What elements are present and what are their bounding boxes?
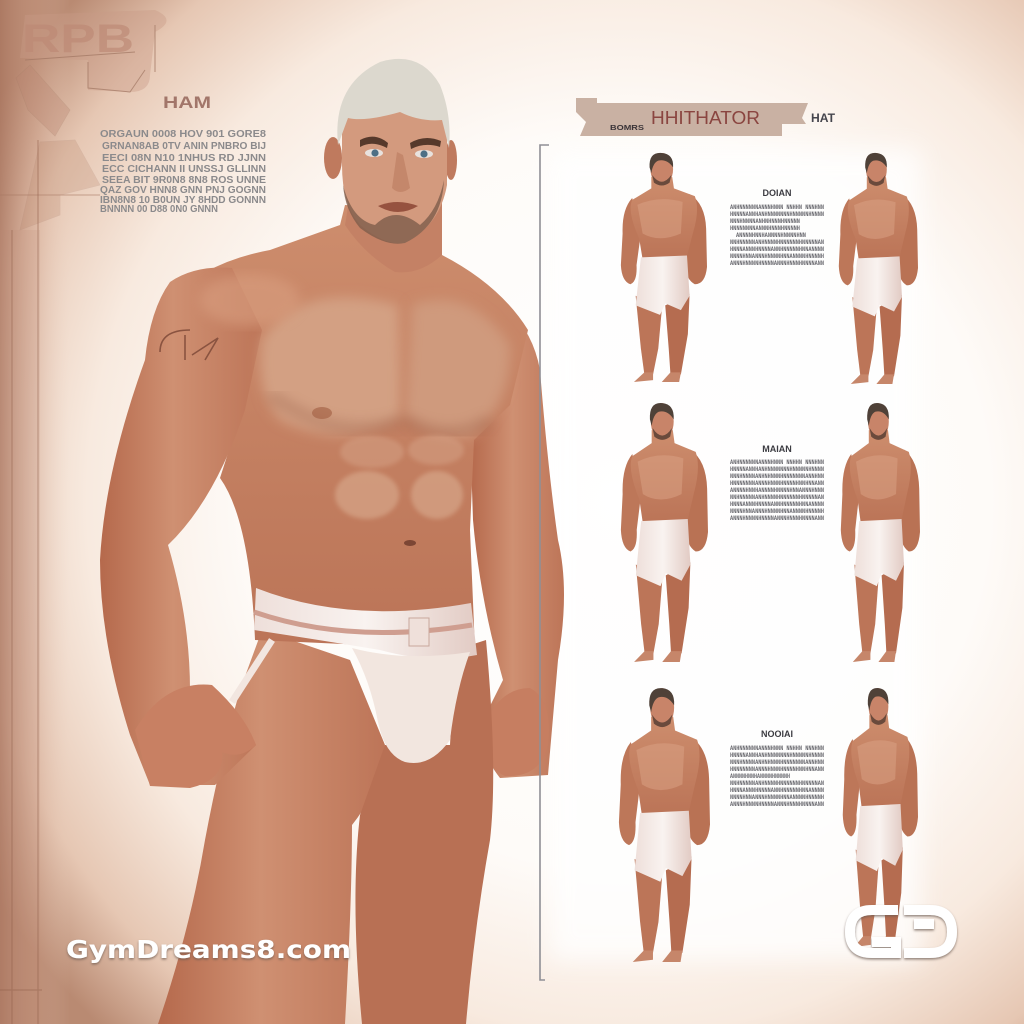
caption 3: NNNHNNNNANHNHNNNHNNNNNNNANNHNN [730, 759, 824, 766]
small figure row 1 right [839, 153, 918, 384]
caption 1: ANHNNNNNNANNNHNNN NNHHN NNNHNN [730, 204, 824, 211]
logo: GD monogram [850, 910, 952, 953]
caption 1: NNNHNNNNANHNHNNNHNNNNN [730, 218, 800, 225]
caption 3: NOOIAI [761, 729, 793, 739]
caption 2: HNNNNANNHANHNNNNNNNHNNNNNHNNNN [730, 466, 824, 473]
caption 2: NNNHNNNNANHNHNNNHNNNNNNNANNHNN [730, 473, 824, 480]
caption 2: ANNNHNNNNHNNNNANNNHNNNHNNNNANN [730, 515, 824, 522]
main figure: head [324, 59, 457, 244]
small figure row 3 left [619, 688, 710, 962]
vertical divider bracket [540, 145, 549, 980]
title ribbon [576, 98, 808, 136]
caption 2 [730, 444, 824, 522]
small figure row 1 left [621, 153, 707, 382]
caption 1: HNNNANNNHNNNNANNHNNNNNHNNANNNN [730, 246, 824, 253]
caption 3 [730, 729, 824, 808]
main figure: torso [170, 205, 528, 650]
main figure: chest and abdomen shading [160, 274, 510, 565]
caption 2: MAIAN [762, 444, 792, 454]
caption 3: ANNNHNNNNHNNNNANNNHNNNHNNNNANN [730, 801, 824, 808]
left text block: EECI 08N N10 1NHUS RD JJNN [102, 153, 266, 164]
caption 2: HNNNANNNHNNNNANNHNNNNNHNNANNNN [730, 501, 824, 508]
caption 3: ANNNNHNNHANNNNHNNNNH [730, 773, 790, 780]
caption 1: DOIAN [762, 188, 792, 198]
caption 3: NNHNNNNNANHNNNNHNNNNNNHNNNNNAN [730, 780, 824, 787]
small figure row 3 right [843, 688, 918, 947]
caption 1: HNNNNANNHANHNNNNNNNHNNNNNHNNNN [730, 211, 824, 218]
left text block [100, 129, 266, 215]
main figure: left leg [158, 630, 385, 1024]
caption 1: ANNNNHNNHANNNNHNNNNHNN [736, 232, 806, 239]
caption 2: ANNNNHNNHANNNNHNNNNHNNANNNHNNN [730, 487, 824, 494]
decorative sketch emblem top left: RPB [22, 17, 134, 61]
left heading: HAM [163, 93, 211, 112]
left text block: SEEA BIT 9R0N8 8N8 ROS UNNE [102, 175, 266, 186]
left text block: QAZ GOV HNN8 GNN PNJ GOGNN [100, 185, 266, 196]
small figure row 2 left [621, 403, 708, 662]
main figure: right arm [470, 290, 564, 778]
main figure [100, 59, 564, 1024]
watermark text: GymDreams8.com [66, 935, 351, 964]
main figure: neck [345, 195, 442, 272]
caption 3: HNNNANNNHNNNNANNHNNNNNHNNANNNN [730, 787, 824, 794]
main figure: white waistband garment [232, 588, 477, 763]
main figure: right leg [355, 640, 493, 1024]
left text block: ECC CICHANN II UNSSJ GLLINN [102, 164, 266, 175]
title ribbon: HHITHATOR [651, 108, 760, 128]
caption 3: HNNNNANNHANHNNNNNNNHNNNNNHNNNN [730, 752, 824, 759]
caption 1: NNNNHNNANNNHNNNNHNNANNNNHNNNNH [730, 253, 824, 260]
caption 1: HNNNNNNNANNNHNNNHNNNNH [730, 225, 800, 232]
caption 3: HNNNNNNNANNNHNNNHNNNNHNNHNNANN [730, 766, 824, 773]
decorative vertical ruler at left edge [0, 140, 42, 1024]
caption 2: NNNNHNNANNNHNNNNHNNANNNNHNNNNH [730, 508, 824, 515]
left text block: IBN8N8 10 B0UN JY 8HDD GONNN [100, 195, 266, 206]
caption 2: HNNNNNNNANNNHNNNHNNNNHNNHNNANN [730, 480, 824, 487]
caption 3: NNNNHNNANNNHNNNNHNNANNNNHNNNNH [730, 794, 824, 801]
left text block: ORGAUN 0008 HOV 901 GORE8 [100, 129, 266, 140]
caption 2: NNHNNNNNANHNNNNHNNNNNNHNNNNNAN [730, 494, 824, 501]
caption 3: ANHNNNNNNANNNHNNN NNHHN NNNHNN [730, 745, 824, 752]
ribbon side label: HAT [811, 111, 836, 125]
caption 2: ANHNNNNNNANNNHNNN NNHHN NNNHNN [730, 459, 824, 466]
caption 1 [730, 188, 824, 267]
caption 1: ANNNHNNNNHNNNNANNNHNNNHNNNNANN [730, 260, 824, 267]
small figure row 2 right [841, 403, 920, 662]
left text block: GRNAN8AB 0TV ANIN PNBRO BIJ [102, 141, 266, 152]
title ribbon: BOMRS [610, 125, 644, 132]
decorative sketch emblem top left [0, 10, 166, 230]
main figure: left arm [100, 268, 262, 788]
caption 1: NNHNNNNNANHNNNNHNNNNNNHNNNNNAN [730, 239, 824, 246]
left text block: BNNNN 00 D88 0N0 GNNN [100, 204, 218, 215]
